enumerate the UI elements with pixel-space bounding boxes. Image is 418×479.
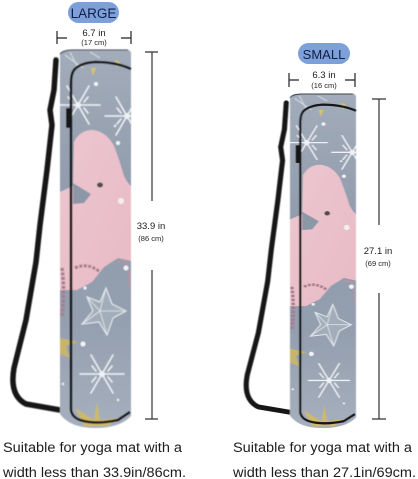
caption: large [2, 440, 186, 479]
width dimension: small: 6.3 in [312, 70, 336, 81]
caption: small [232, 440, 416, 479]
caption: small: Suitable for yoga mat with a [233, 440, 412, 456]
small bag [246, 94, 373, 428]
height dimension: large: 33.9 in [137, 221, 165, 232]
caption: large: Suitable for yoga mat with a [3, 440, 182, 456]
large bag [13, 50, 149, 428]
height dimension: large [137, 52, 165, 419]
height dimension: large: (86 cm) [138, 234, 164, 243]
label: SMALL [298, 43, 350, 64]
width dimension: large: (17 cm) [81, 38, 107, 47]
width dimension: large: 6.7 in [82, 28, 106, 39]
height dimension: small [364, 99, 392, 419]
label: LARGE [68, 2, 119, 23]
height dimension: small: (69 cm) [365, 259, 391, 268]
width dimension: small [289, 70, 355, 90]
width dimension: large [57, 28, 131, 47]
label: LARGE: LARGE [71, 6, 116, 21]
width dimension: small: (16 cm) [311, 81, 337, 90]
label: SMALL: SMALL [303, 47, 345, 62]
height dimension: small: 27.1 in [364, 246, 392, 257]
